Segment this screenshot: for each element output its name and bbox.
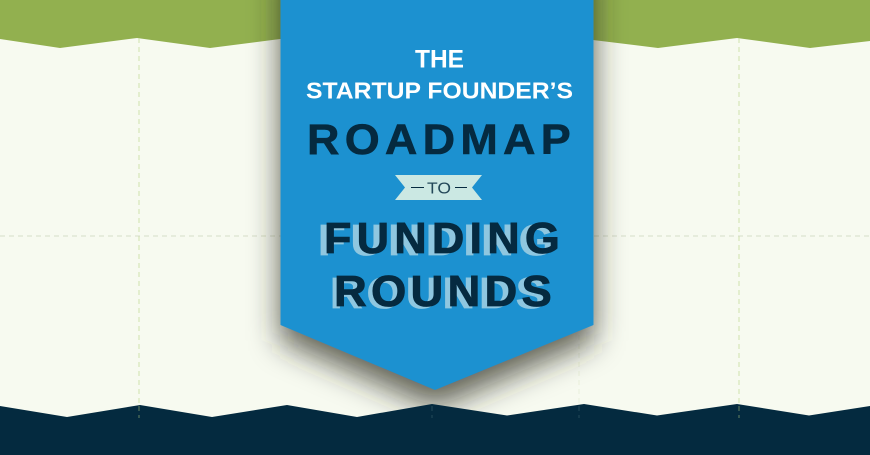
blue banner [280,0,594,390]
heading: ROUNDS: ROUNDS [334,268,556,316]
ribbon: TO [395,175,482,200]
heading shadow: FUNDING: FUNDING [318,217,559,265]
title line: ROADMAP: ROADMAP [307,116,576,164]
ribbon: TO: TO [427,180,451,198]
navy bottom zigzag band [0,404,870,455]
title line: THE: THE [415,46,464,74]
heading shadow: ROUNDS: ROUNDS [330,270,550,318]
green top zigzag band [0,0,870,48]
banner shadow [280,0,594,408]
title line: STARTUP FOUNDER'S: STARTUP FOUNDER’S [306,78,573,104]
heading: FUNDING: FUNDING [324,215,565,263]
